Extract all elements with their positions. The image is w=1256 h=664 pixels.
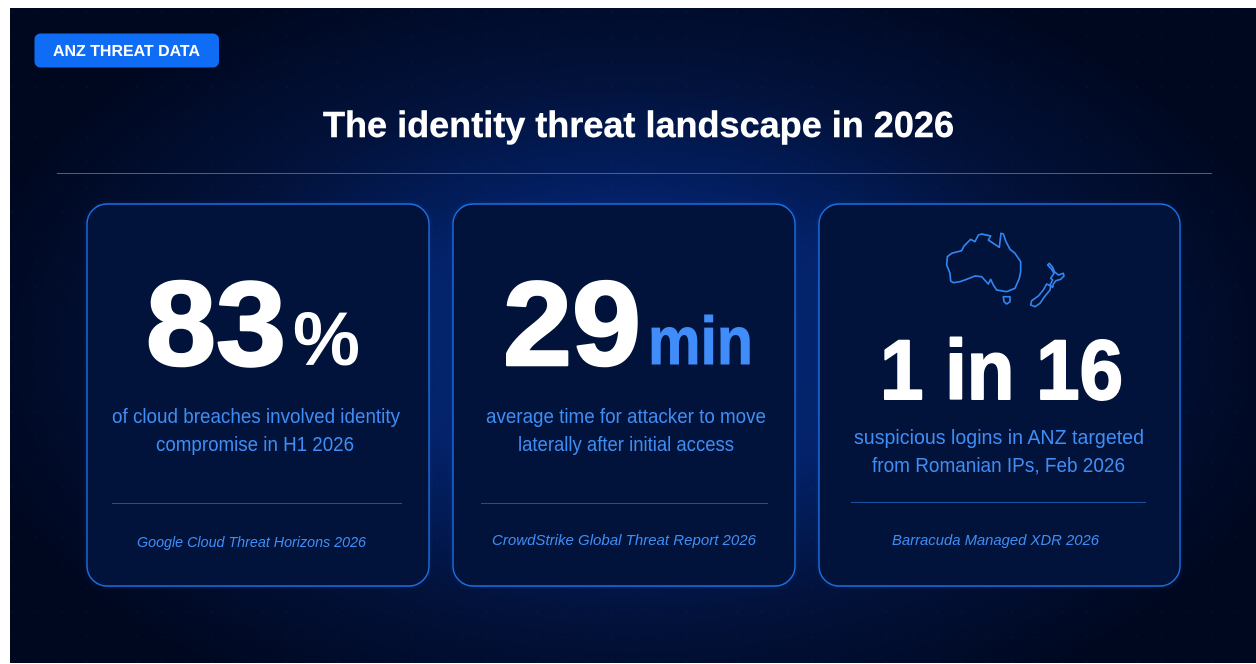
description: of cloud breaches involved identity (112, 406, 400, 428)
description (112, 406, 400, 456)
stat: 29 min (503, 257, 753, 391)
stat: 29 min: min (648, 303, 753, 379)
badge: ANZ threat data (34, 34, 219, 68)
source: CrowdStrike Global Threat Report 2026 (492, 532, 757, 549)
panel: lateral movement stat (453, 204, 795, 586)
source: Google Cloud Threat Horizons 2026 (137, 534, 367, 551)
description: average time for attacker to move (486, 406, 766, 428)
panel: ANZ logins stat (819, 204, 1180, 586)
description (486, 406, 766, 456)
description: laterally after initial access (518, 434, 734, 456)
stat: 29 min: 29 (503, 257, 641, 391)
icon: Australia and New Zealand map outline (947, 233, 1064, 307)
description: suspicious logins in ANZ targeted (854, 427, 1144, 449)
source: Barracuda Managed XDR 2026 (892, 532, 1100, 549)
stat: 1 in 16: 1 in 16 (880, 323, 1123, 417)
title: The identity threat landscape in 2026 (323, 104, 954, 145)
stat: 83%: % (293, 297, 360, 382)
description (854, 427, 1144, 477)
badge: ANZ threat data: ANZ THREAT DATA (53, 43, 200, 60)
stat: 83% (146, 257, 360, 391)
stat: 83%: 83 (146, 257, 286, 391)
panel: cloud breaches stat (87, 204, 429, 586)
description: compromise in H1 2026 (156, 434, 354, 456)
description: from Romanian IPs, Feb 2026 (872, 455, 1125, 477)
